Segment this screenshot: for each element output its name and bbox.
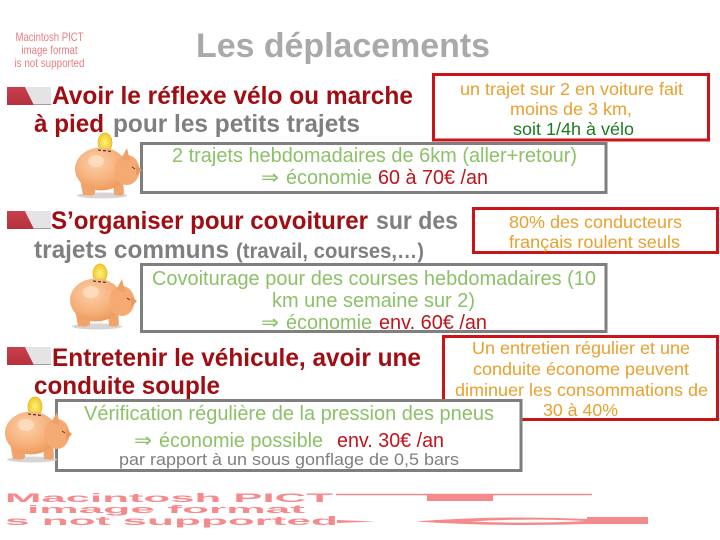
callout: entretien régulier: diminuer les consommations de: [455, 380, 708, 400]
callout: trajet en voiture: [434, 74, 708, 140]
icon: piggy bank 2: [70, 264, 137, 330]
heading: entretien du véhicule: conduite souple: [34, 372, 220, 400]
heading: covoiturage: (travail, courses,…): [236, 240, 424, 263]
image placeholder: top left: Macintosh PICT: [16, 30, 84, 44]
callout: entretien régulier: Un entretien régulier et une: [472, 338, 690, 358]
heading: vélo ou marche: à pied: [34, 110, 104, 138]
panel: économie trajets hebdomadaires: ⇒: [261, 165, 279, 189]
panel: économie trajets hebdomadaires: 60 à 70€ /an: [378, 167, 488, 189]
panel: économie trajets hebdomadaires: 2 trajets hebdomadaires de 6km (aller+retour): [172, 145, 577, 167]
callout: entretien régulier: 30 à 40%: [543, 400, 618, 420]
callout: trajet en voiture: moins de 3 km,: [510, 99, 632, 119]
bullet icon: section 2: [7, 211, 51, 229]
callout: 80% des conducteurs: 80% des conducteurs: [509, 212, 682, 232]
heading: vélo ou marche: pour les petits trajets: [113, 110, 360, 138]
heading: covoiturage: [34, 207, 458, 264]
panel: pression des pneus: [56, 400, 521, 470]
heading: entretien du véhicule: Entretenir le véhicule, avoir une: [52, 344, 421, 372]
heading: vélo ou marche: Avoir le réflexe vélo ou marche: [52, 82, 413, 110]
panel: économie covoiturage: [142, 264, 606, 334]
panel: économie covoiturage: économie: [286, 312, 372, 334]
image placeholder: top left: is not supported: [14, 56, 84, 70]
image placeholder: bottom stretched: Macintosh PICT: [5, 491, 335, 505]
panel: économie trajets hebdomadaires: [142, 144, 606, 192]
callout: 80% des conducteurs: [474, 208, 718, 252]
heading: covoiturage: trajets communs: [34, 236, 229, 264]
icon: piggy bank 3: [5, 397, 72, 462]
heading: entretien du véhicule: [34, 344, 421, 400]
callout: entretien régulier: [444, 336, 718, 420]
image placeholder: top left: image format: [22, 43, 78, 57]
heading: covoiturage: sur des: [376, 207, 458, 235]
panel: économie covoiturage: env. 60€ /an: [379, 312, 487, 334]
panel: économie covoiturage: km une semaine sur 2): [272, 290, 475, 312]
icon: piggy bank 1: [75, 133, 142, 198]
bullet icon: section 3: [7, 347, 51, 365]
panel: économie covoiturage: ⇒: [261, 310, 279, 334]
panel: pression des pneus: économie possible: [159, 430, 323, 452]
panel: pression des pneus: ⇒: [134, 428, 152, 452]
panel: pression des pneus: env. 30€ /an: [337, 430, 444, 452]
heading: covoiturage: S’organiser pour covoiturer: [51, 207, 368, 235]
callout: trajet en voiture: soit 1/4h à vélo: [513, 119, 634, 139]
panel: pression des pneus: par rapport à un sous gonflage de 0,5 bars: [119, 450, 459, 469]
heading: vélo ou marche: [34, 82, 413, 138]
image placeholder: bottom stretched: [5, 491, 648, 528]
callout: trajet en voiture: un trajet sur 2 en voiture fait: [460, 79, 683, 99]
image placeholder: bottom stretched: image format: [27, 504, 306, 516]
panel: pression des pneus: Vérification régulière de la pression des pneus: [84, 403, 494, 425]
title: Les déplacements: [196, 27, 490, 65]
callout: 80% des conducteurs: français roulent seuls: [509, 232, 680, 252]
callout: entretien régulier: conduite économe peuvent: [473, 359, 689, 379]
panel: économie trajets hebdomadaires: économie: [286, 167, 372, 189]
bullet icon: section 1: [7, 87, 51, 105]
image placeholder: bottom stretched: s not supported: [5, 514, 338, 528]
panel: économie covoiturage: Covoiturage pour des courses hebdomadaires (10: [152, 268, 596, 290]
image placeholder: top left: [14, 30, 84, 70]
